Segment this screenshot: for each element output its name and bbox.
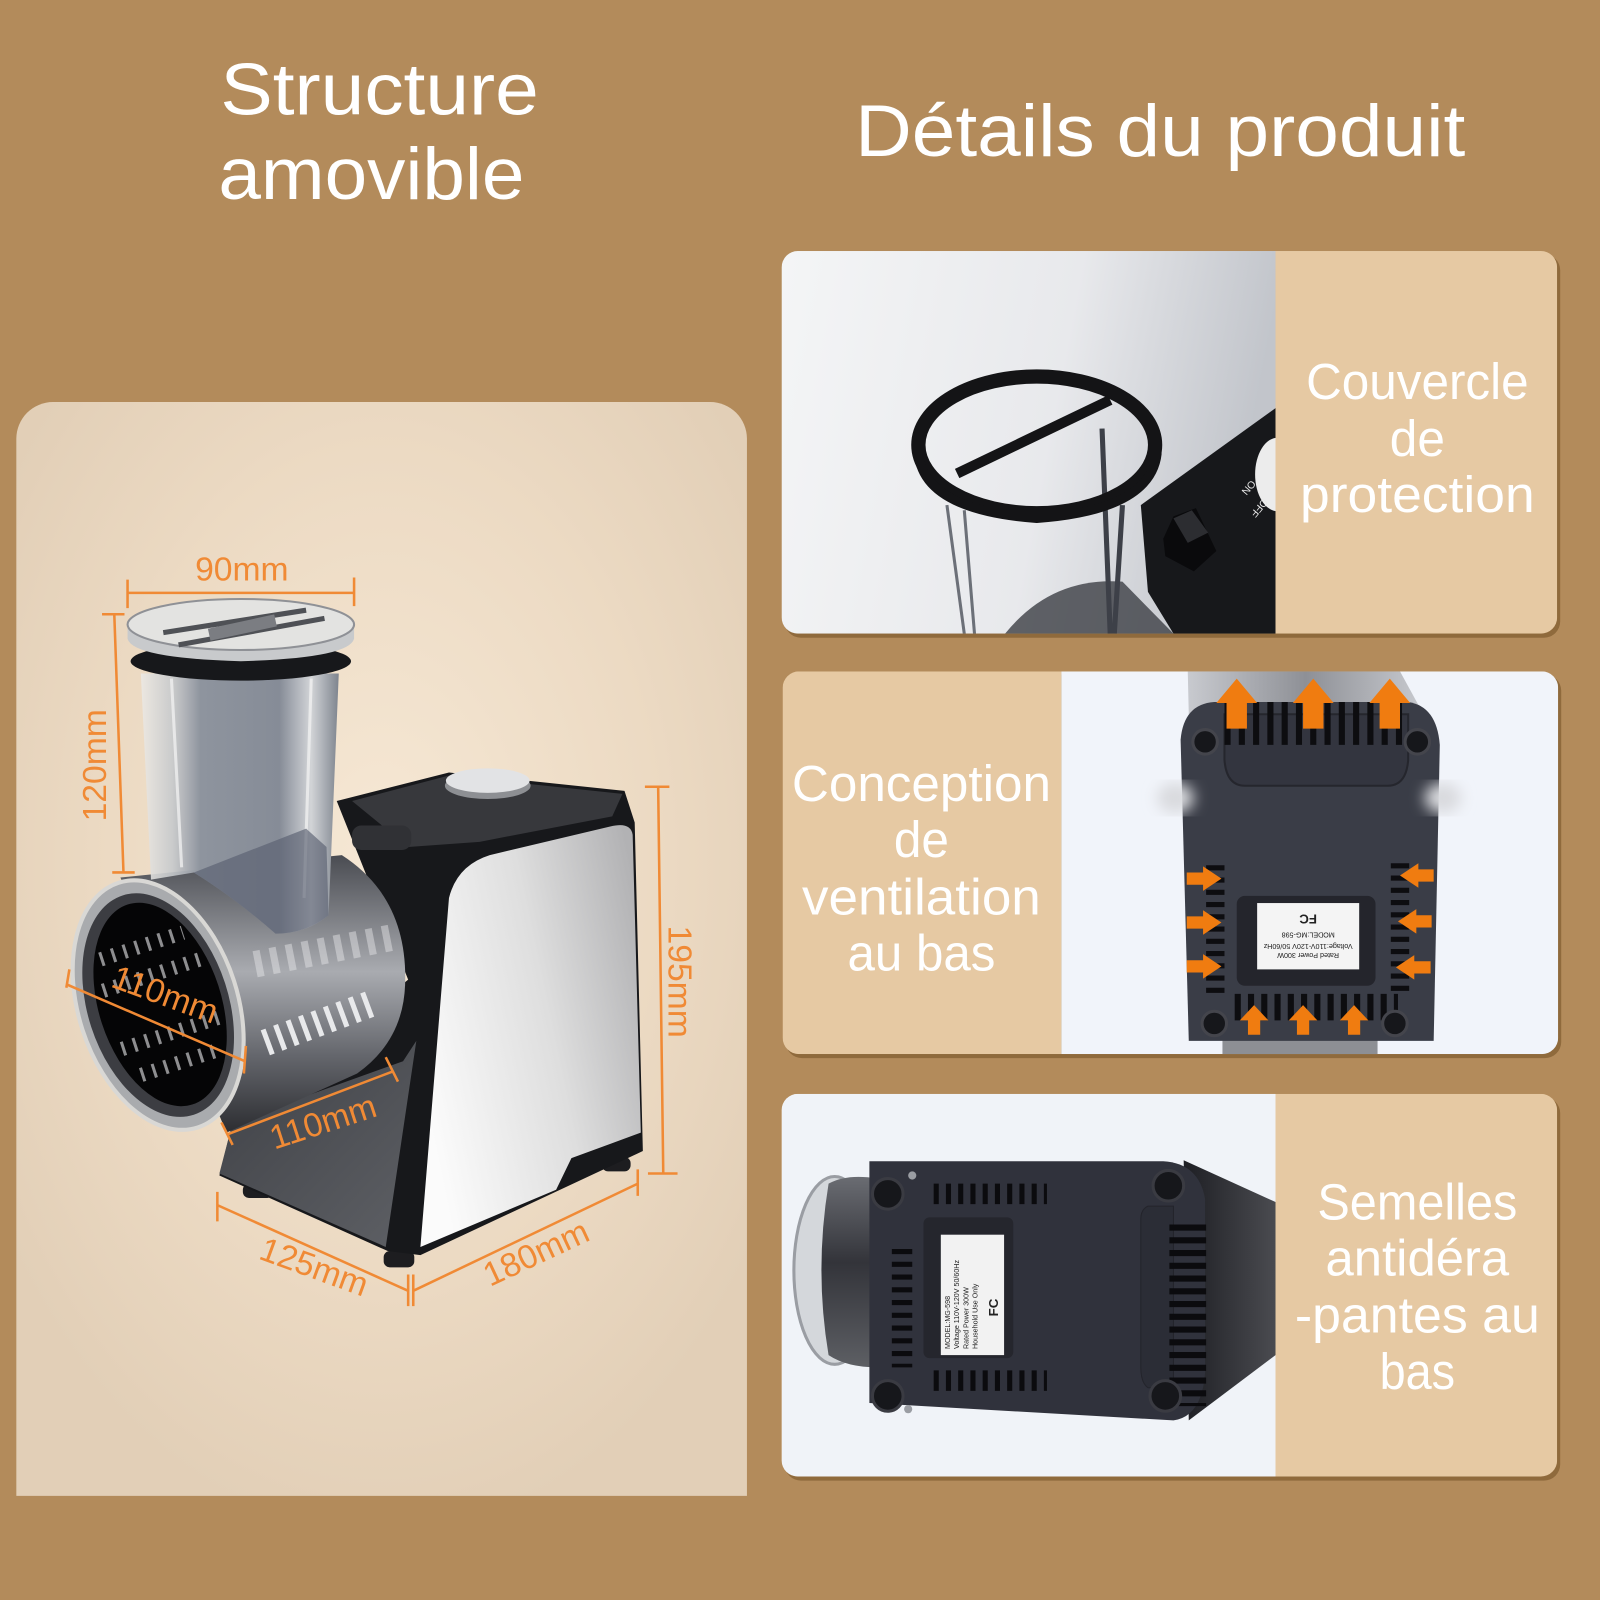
airflow arrows: top [1216,679,1410,729]
label text: Conception [792,755,1051,812]
blurred smudges [1157,783,1461,813]
rating plate [1237,896,1376,986]
feet [243,1157,631,1267]
label text: protection [1300,466,1535,523]
drum front rim [43,858,274,1152]
rating plate: Rated Power 300W [962,1287,970,1349]
ON OFF markings: OFF [1248,496,1269,519]
rating plate: Voltage:110V-120V 50/60Hz [1263,942,1353,950]
dimension: 180mm [413,1169,638,1306]
feed cup [141,673,339,934]
panel: Conception de ventilation au bas [783,671,1561,1058]
dimension: 195mm: 195mm [660,926,697,1038]
label text [792,755,1051,981]
dimension: 180mm: 180mm [478,1213,595,1294]
rating plate: Voltage 110V-120V 50/60Hz [953,1260,961,1349]
label text: bas [1380,1343,1455,1400]
dimension: drum length 110mm [221,1057,398,1157]
rating plate: FC [1299,911,1317,926]
dimension: drum diameter 110mm [66,959,246,1073]
lid ring [131,642,351,681]
dimension: 195mm [645,787,697,1173]
appliance rear top [1188,671,1423,714]
grey side panel [219,1041,416,1247]
panel: Couvercle de protection [782,251,1560,638]
vent slits [902,1194,1188,1406]
dimension: 120mm: 120mm [77,709,114,821]
rating plate: MODEL:MG-598 [1282,931,1335,939]
dimension: drum diameter 110mm: 110mm [107,959,223,1031]
airflow arrows: bottom [1240,1005,1368,1035]
appliance side [1184,1160,1276,1420]
side vent slits [1215,863,1400,996]
label text: Semelles [1317,1173,1517,1230]
label text: Couvercle [1306,353,1529,410]
square button [1163,508,1216,571]
label text: de [1390,410,1445,467]
body top in black [1141,408,1276,634]
label text: -pantes au [1295,1287,1540,1344]
cup bottom reflection [194,829,329,934]
transparent cup [947,429,1122,634]
appliance underside [1181,702,1440,1041]
title: Structure amovible: Structure [220,47,539,130]
control knob [445,768,531,799]
top surface [352,776,622,847]
title: Détails du produit: Détails du produit [855,89,1465,172]
appliance underside [869,1161,1205,1420]
title: Structure amovible: amovible [218,132,524,215]
dimension: 90mm [128,552,354,608]
ON OFF markings: ON [1239,478,1257,496]
dimension: 125mm: 125mm [255,1231,373,1304]
cup chute highlights [171,679,311,898]
label text: antidéra [1326,1230,1510,1287]
dimension: drum length 110mm: 110mm [265,1088,381,1157]
screws [904,1171,916,1413]
body shell [219,772,643,1255]
lid [128,599,354,661]
title: Structure amovible [218,47,539,215]
rating plate: FC [986,1298,1001,1316]
stainless front panel [420,825,641,1247]
panel: Semelles antidérapantes au bas [782,1094,1560,1481]
label text: au bas [847,924,995,981]
protective ring lid [918,377,1157,518]
label text [1295,1173,1540,1400]
drum cylinder [120,855,405,1133]
drum cylinder [821,1176,870,1368]
dimension: 125mm [217,1192,408,1306]
dimension: 90mm: 90mm [195,552,289,589]
rating plate [923,1217,1013,1358]
drum slots [255,937,396,1043]
bottom vent slits [1235,994,1398,1020]
label text: de [894,811,949,868]
bowl shadow [1005,581,1173,634]
tan label block [1276,251,1557,634]
neck [1222,1040,1378,1054]
dimension: 120mm [77,614,135,872]
airflow arrows: sides [1187,863,1434,980]
label text: ventilation [802,868,1041,925]
ON OFF markings [1242,481,1266,518]
rating plate: MODEL:MG-598 [944,1296,952,1349]
panel: product dimensions [16,402,747,1496]
product: vegetable slicer [43,599,643,1267]
handle recess [1224,714,1408,786]
rating plate: Household Use Only [972,1283,980,1349]
clear drum rim [792,1175,846,1366]
handle recess [1141,1206,1173,1388]
non-slip feet [872,1170,1184,1411]
top vent slits [1224,702,1410,744]
silver dial [1255,438,1276,512]
label text [1300,353,1535,523]
switch button [352,826,411,850]
rubber feet [1193,730,1430,1036]
rating plate: Rated Power 300W [1277,951,1339,959]
